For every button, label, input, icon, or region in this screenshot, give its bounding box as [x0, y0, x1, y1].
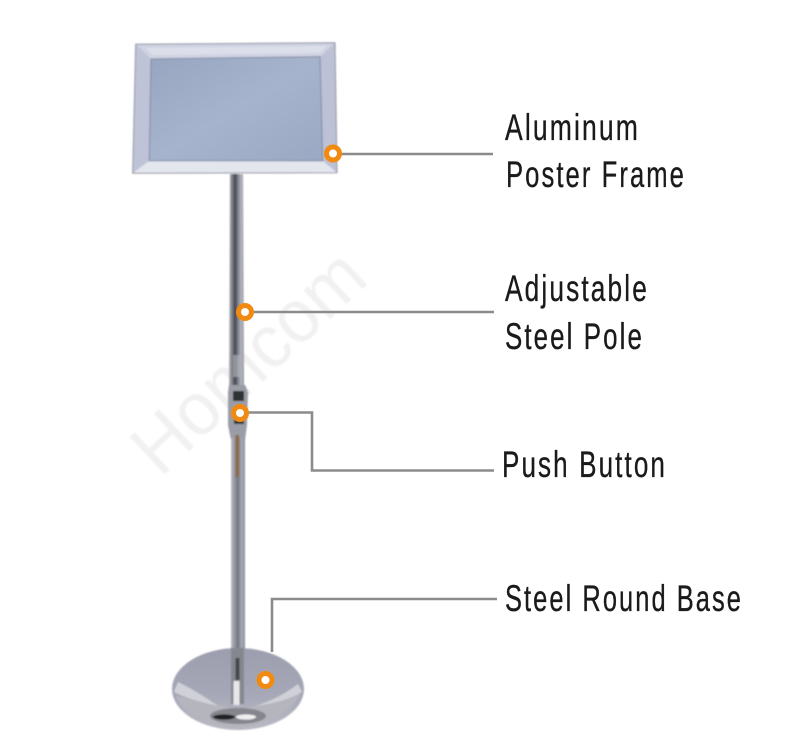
leader line: pole	[253, 311, 494, 313]
steel pole	[228, 174, 248, 652]
pole slot	[236, 435, 239, 477]
label: Adjustable Steel Pole: Adjustable	[505, 268, 649, 309]
marker: frame	[326, 147, 340, 160]
leader line: frame	[340, 153, 493, 155]
label: Aluminum Poster Frame	[505, 107, 686, 195]
label: Aluminum Poster Frame: Aluminum	[505, 107, 640, 148]
label: Adjustable Steel Pole	[505, 268, 649, 357]
lower pole	[231, 438, 245, 652]
aluminum poster frame	[133, 43, 337, 173]
marker: base	[259, 674, 272, 686]
pole joint highlight	[233, 355, 240, 377]
frame bottom bevel	[133, 161, 337, 173]
label: Adjustable Steel Pole: Steel Pole	[505, 316, 644, 357]
pole collar	[228, 385, 248, 440]
marker: pole	[238, 306, 252, 318]
marker: push button	[234, 406, 246, 420]
label: Push Button: Push Button	[502, 444, 667, 485]
leader line: base	[272, 599, 497, 652]
round base	[172, 648, 304, 730]
frame right bevel	[320, 43, 337, 173]
frame left bevel	[133, 44, 151, 173]
upper pole	[229, 174, 244, 385]
frame top bevel	[136, 43, 335, 59]
label: Aluminum Poster Frame: Poster Frame	[506, 154, 686, 195]
leader line: push button	[248, 412, 494, 470]
watermark: Homcom: Homcom	[114, 233, 382, 490]
frame poster area	[149, 57, 323, 161]
